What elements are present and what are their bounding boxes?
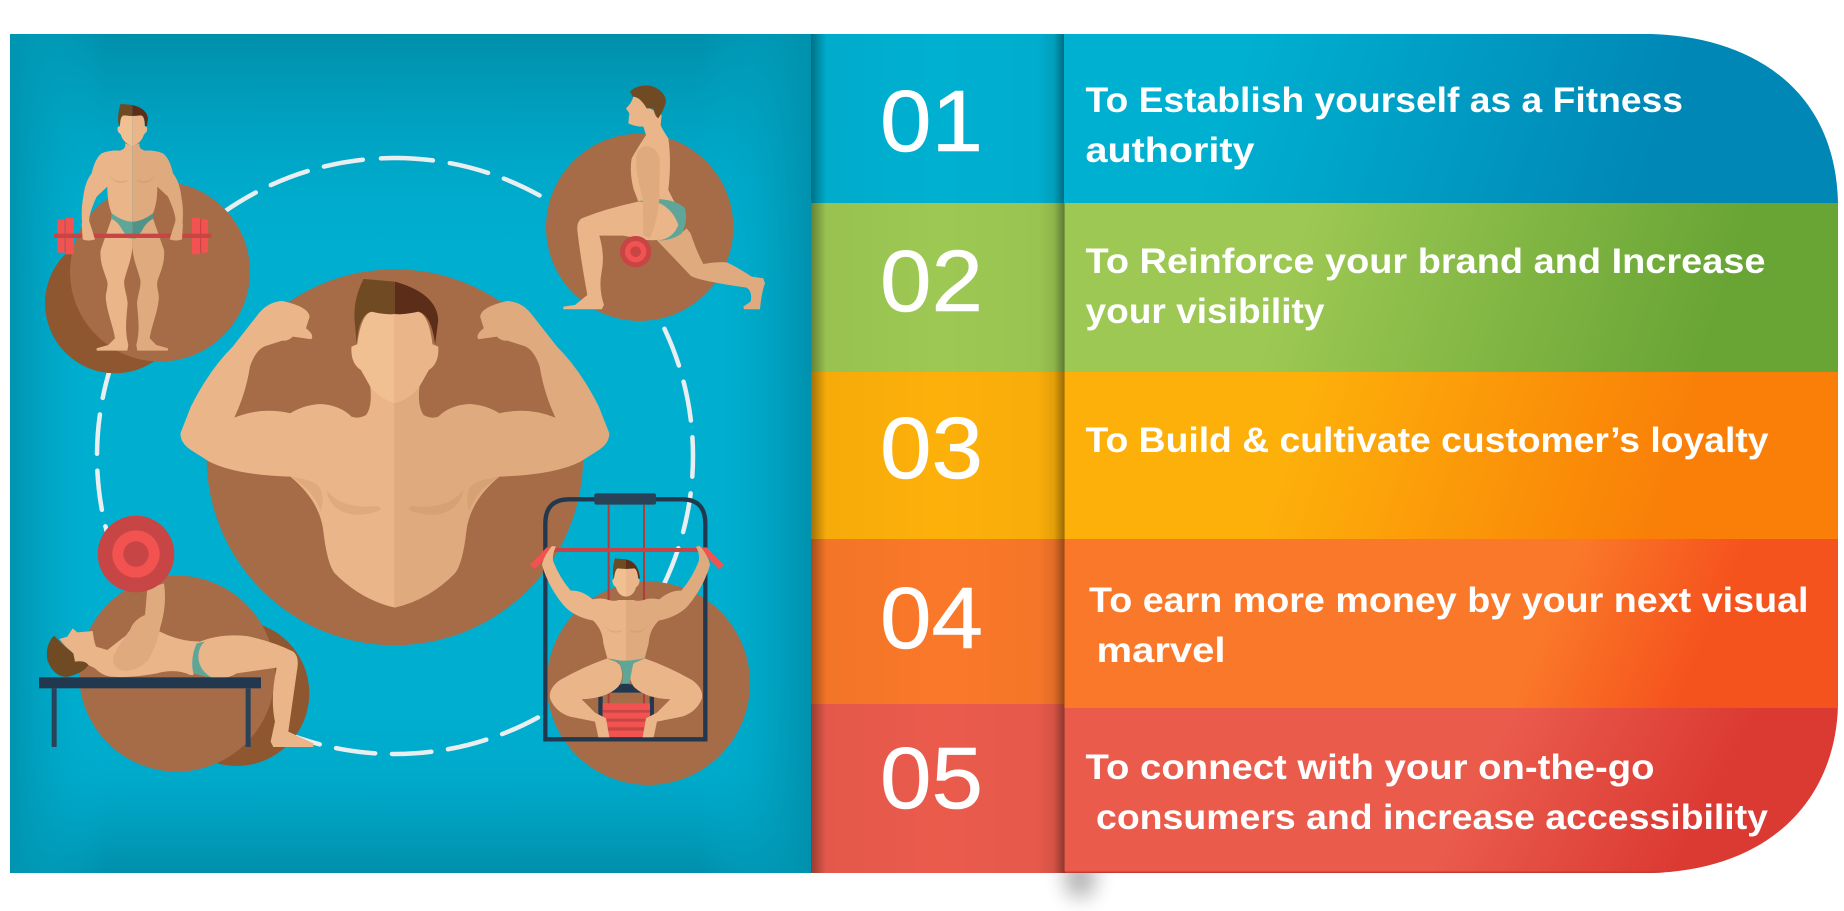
- figure: man bench pressing: [39, 516, 313, 772]
- number tab 04: [811, 539, 1064, 704]
- row 4 text: [1089, 581, 1808, 670]
- row 2 text: To Reinforce your brand and Increase: [1086, 242, 1766, 281]
- figure: man at lat pulldown machine: [530, 493, 750, 785]
- row 3 text: To Build & cultivate customer’s loyalty: [1086, 421, 1769, 460]
- row 1 text: [1086, 81, 1683, 170]
- row 4 text: To earn more money by your next visual: [1089, 581, 1808, 620]
- number tab 03: 03: [880, 400, 983, 497]
- dashed circle connecting figures: [47, 108, 743, 804]
- row 1 text: To Establish yourself as a Fitness: [1086, 81, 1683, 120]
- number tab 03: [811, 372, 1064, 539]
- figure: man lunging: [546, 85, 765, 321]
- row 5 text: consumers and increase accessibility: [1096, 798, 1769, 837]
- number tab 04: 04: [880, 570, 983, 667]
- number tab 01: [811, 34, 1064, 203]
- figure: central bodybuilder: [180, 269, 609, 645]
- text rows: [1064, 34, 1844, 873]
- figure: man standing with barbell: [45, 104, 250, 373]
- row 5 text: To connect with your on-the-go: [1086, 748, 1654, 787]
- number tab 02: 02: [880, 233, 983, 330]
- row 2 text: [1086, 242, 1766, 331]
- number column: [811, 34, 1064, 873]
- row 4 text: marvel: [1096, 631, 1226, 670]
- number tab 05: [811, 704, 1064, 873]
- row 2 text: your visibility: [1086, 292, 1325, 331]
- shadow under row 5 fold: [1064, 858, 1096, 898]
- row 5 text: [1086, 748, 1769, 837]
- number tab 02: [811, 203, 1064, 372]
- row 1 text: authority: [1086, 131, 1255, 170]
- panel: illustration background: [10, 34, 812, 873]
- number tab 01: 01: [880, 73, 983, 170]
- number tab 05: 05: [880, 730, 983, 827]
